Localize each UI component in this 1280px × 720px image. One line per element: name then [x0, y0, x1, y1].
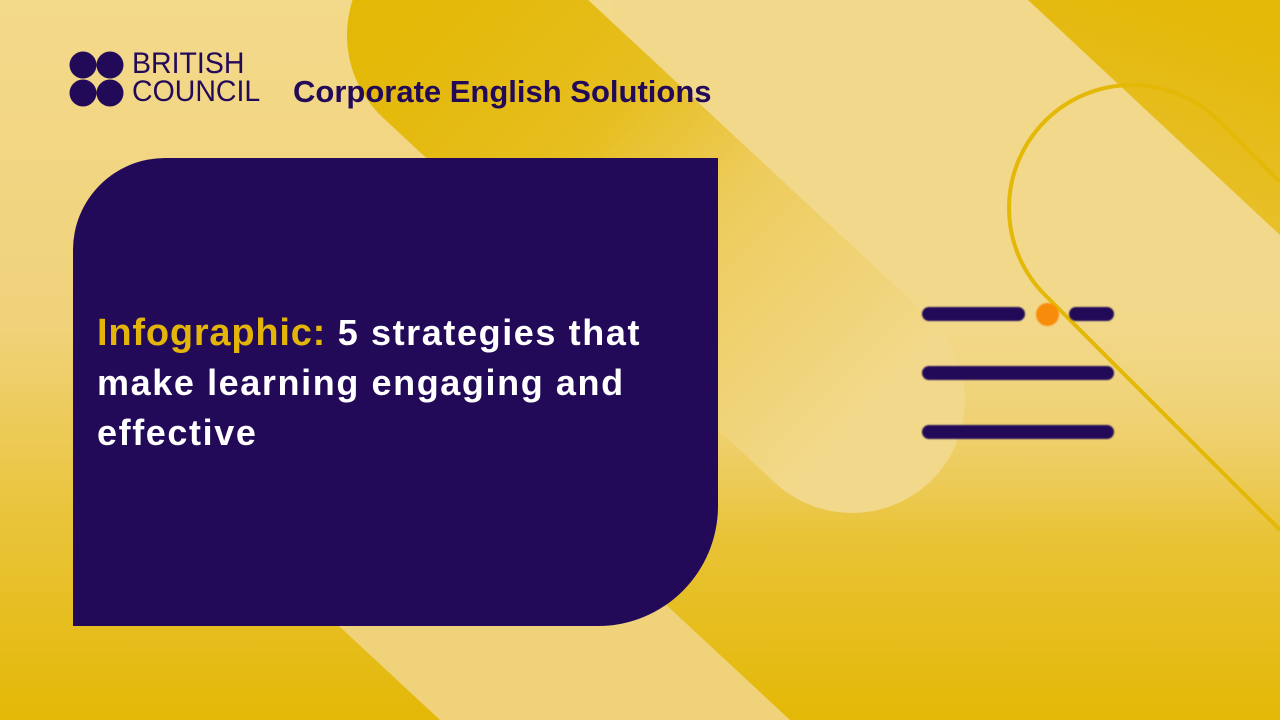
panel: title card	[73, 158, 718, 626]
title	[97, 312, 641, 453]
logo: British Council	[70, 47, 260, 108]
logo: British Council: COUNCIL	[132, 75, 260, 108]
title: Infographic: 5 strategies that	[97, 312, 641, 354]
subtitle: Corporate English Solutions: Corporate English Solutions	[293, 74, 712, 109]
logo: British Council: BRITISH	[132, 47, 244, 80]
icon: menu lines	[921, 302, 1115, 440]
title: effective	[97, 412, 257, 453]
title: make learning engaging and	[97, 362, 625, 403]
